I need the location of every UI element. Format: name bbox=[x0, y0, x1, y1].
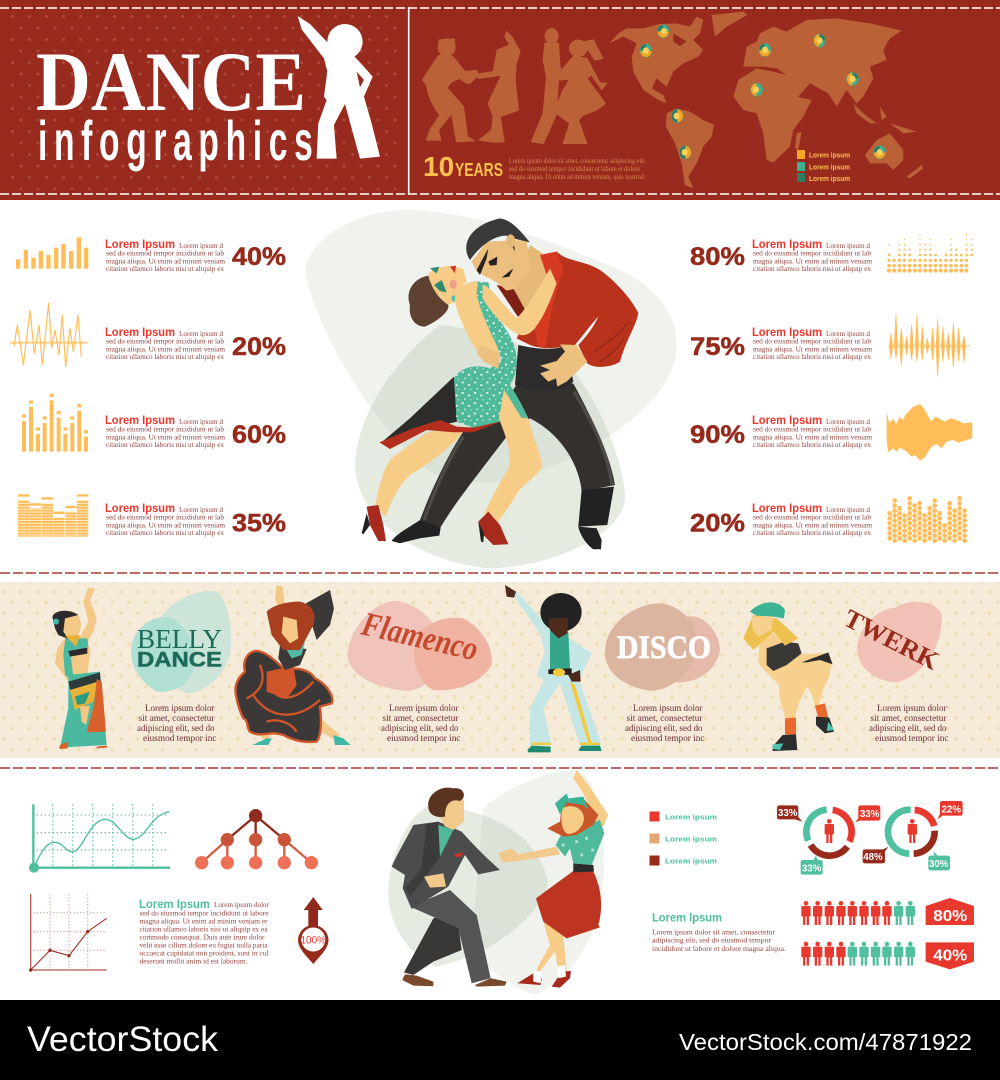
text: belly dance: sit amet, consectetur bbox=[138, 713, 214, 723]
label: 10 years: YEARS bbox=[455, 160, 503, 180]
text row: left 2: sed do eiusmod tempor incididunt ut lab bbox=[106, 336, 224, 346]
footer: watermark bar: VectorStock.com/47871922 bbox=[679, 1029, 972, 1055]
sequins on dress bbox=[454, 282, 517, 428]
chart: male donut: 33% bbox=[778, 808, 797, 819]
text row: right 3: 90% bbox=[690, 421, 745, 449]
title: Dance: DANCE bbox=[36, 35, 306, 129]
text row: right 3: citation ullamco laboris nisi ut aliquip ex bbox=[753, 440, 871, 449]
title: disco with blobs bbox=[605, 603, 720, 691]
text row: left 2: citation ullamco laboris nisi ut aliquip ex bbox=[106, 352, 224, 361]
text row: right 4: sed do eiusmod tempor incididunt ut lab bbox=[753, 512, 871, 522]
footer: watermark bar: VectorStock bbox=[27, 1020, 219, 1059]
illustration: tango couple bbox=[305, 210, 677, 568]
chart: male donut bbox=[777, 805, 880, 875]
text row: right 1: Lorem Ipsum bbox=[752, 239, 822, 251]
legend: three colours: Lorem ipsum bbox=[665, 858, 717, 866]
text row: right 1: magna aliqua. Ut enim ad minim veniam bbox=[753, 256, 872, 265]
woman's teal dress bbox=[454, 282, 528, 428]
divider dashed bbox=[0, 573, 1000, 768]
badge: 40% bbox=[926, 942, 974, 969]
text: belly dance bbox=[137, 703, 216, 743]
text: flamenco: sit amet, consectetur bbox=[382, 713, 458, 723]
panel: dance styles band bbox=[0, 582, 1000, 758]
text: disco: sit amet, consectetur bbox=[626, 713, 702, 723]
pictogram: 40 percent people bbox=[801, 942, 915, 966]
chart: male donut: 33% bbox=[860, 809, 879, 820]
title: twerk with blob: TWERK bbox=[839, 604, 944, 676]
woman's back leg bbox=[375, 429, 463, 517]
figure: flamenco dancer bbox=[235, 585, 351, 745]
text row: left 3: magna aliqua. Ut enim ad minim veniam bbox=[106, 432, 225, 441]
text row: right 1: 80% bbox=[690, 243, 745, 271]
hands and arm bbox=[424, 847, 560, 888]
text row: right 2: citation ullamco laboris nisi ut aliquip ex bbox=[753, 352, 871, 361]
chart: red line chart bbox=[29, 894, 107, 972]
text row: left 3: citation ullamco laboris nisi ut aliquip ex bbox=[106, 440, 224, 449]
man's red shirt bbox=[497, 252, 638, 367]
text row: right 1 bbox=[690, 239, 872, 273]
text block: bottom left: Lorem ipsum dolor bbox=[214, 900, 270, 909]
text row: right 2: magna aliqua. Ut enim ad minim veniam bbox=[753, 344, 872, 353]
text row: left 2: magna aliqua. Ut enim ad minim veniam bbox=[106, 344, 225, 353]
text row: left 3: 60% bbox=[232, 421, 286, 449]
text block: bottom left: citation ullamco laboris nisi ut aliquip ex ea bbox=[140, 925, 268, 934]
man's hand on back bbox=[477, 345, 500, 369]
man's head and hair bbox=[466, 218, 531, 291]
man's boots bbox=[392, 487, 614, 549]
text row: left 3: sed do eiusmod tempor incididunt ut lab bbox=[106, 424, 224, 434]
text row: right 3: Lorem Ipsum bbox=[752, 415, 822, 427]
text: disco: adipiscing elit, sed do bbox=[625, 723, 703, 733]
text row: right 4: Lorem Ipsum bbox=[752, 503, 822, 515]
background blobs bbox=[388, 770, 604, 995]
title: belly dance with blobs: BELLY bbox=[137, 624, 222, 654]
label: 10 years: 10 bbox=[423, 151, 454, 182]
text row: left 1: citation ullamco laboris nisi ut aliquip ex bbox=[106, 264, 224, 273]
text block: bottom right: adipiscing elit, sed do eiusmod tempor bbox=[652, 936, 772, 945]
text: disco: Lorem ipsum dolor bbox=[633, 703, 702, 713]
woman's teal blouse bbox=[556, 820, 604, 865]
text row: left 3 bbox=[105, 415, 286, 449]
text block: bottom left: sed do eiusmod tempor incididunt ut labore bbox=[140, 909, 269, 918]
text row: left 4: 35% bbox=[232, 510, 286, 538]
icon: 100 percent pin with arrow bbox=[298, 897, 328, 964]
woman's head and hair bbox=[547, 793, 598, 837]
text block: bottom left: commodo consequat. Duis aute irure dolor bbox=[140, 933, 265, 942]
skirt with red trim bbox=[379, 377, 501, 449]
icon: 100 percent pin with arrow: 100% bbox=[300, 934, 326, 946]
text row: right 4: magna aliqua. Ut enim ad minim veniam bbox=[753, 520, 872, 529]
text row: left 1: Lorem Ipsum bbox=[105, 239, 175, 251]
pictogram: 80 percent people bbox=[801, 901, 915, 925]
chart: yellow peak bars bbox=[22, 394, 88, 452]
footer: watermark bar bbox=[0, 1000, 1000, 1080]
map legend: Lorem ipsum bbox=[809, 176, 850, 183]
badge: 80% bbox=[926, 898, 974, 925]
text block: header description: magna aliqua. Ut enim ad minim veniam, quis nostrud bbox=[509, 173, 644, 181]
woman's heels bbox=[362, 505, 508, 545]
chart: spiked wave bbox=[888, 314, 970, 377]
text row: right 1: citation ullamco laboris nisi ut aliquip ex bbox=[753, 264, 871, 273]
chart: honeycomb equalizer bbox=[890, 495, 965, 541]
illustration: swing couple bbox=[388, 770, 608, 995]
text block: header description bbox=[509, 157, 646, 181]
woman's raised arm bbox=[573, 770, 608, 827]
text row: right 3: Lorem ipsum d bbox=[826, 417, 870, 426]
legend: three colours: Lorem ipsum bbox=[665, 814, 717, 822]
text: twerk: adipiscing elit, sed do bbox=[869, 723, 947, 733]
text row: left 4: sed do eiusmod tempor incididunt ut lab bbox=[106, 512, 224, 522]
title: infographics: infographics bbox=[38, 109, 313, 172]
text row: left 1: Lorem ipsum d bbox=[179, 241, 223, 250]
chart: female donut: 30% bbox=[929, 859, 948, 870]
text row: right 4 bbox=[690, 503, 872, 538]
chart: female donut: 22% bbox=[942, 804, 961, 815]
text row: left 3: Lorem Ipsum bbox=[105, 415, 175, 427]
text block: bottom left: Lorem Ipsum bbox=[139, 899, 210, 911]
woman's belt bbox=[573, 863, 594, 872]
chart: sound waveform bbox=[887, 404, 972, 461]
text row: left 4 bbox=[105, 503, 286, 538]
text row: left 2: 20% bbox=[232, 333, 286, 361]
chart: node tree bbox=[195, 809, 318, 869]
text row: right 4: 20% bbox=[690, 510, 745, 538]
text row: right 2: 75% bbox=[690, 333, 745, 361]
text row: left 1 bbox=[105, 239, 286, 273]
text: twerk: Lorem ipsum dolor bbox=[877, 703, 946, 713]
text: belly dance: adipiscing elit, sed do bbox=[137, 723, 215, 733]
map legend: Lorem ipsum bbox=[809, 152, 850, 160]
badge: 80%: 80% bbox=[933, 908, 968, 925]
text block: bottom right: Lorem Ipsum bbox=[652, 912, 722, 924]
text: flamenco bbox=[381, 703, 460, 743]
legend: three colours bbox=[650, 812, 717, 866]
text row: right 2: Lorem ipsum d bbox=[826, 329, 870, 338]
chart: yellow zigzag wave bbox=[10, 303, 88, 367]
text row: right 2: sed do eiusmod tempor incididunt ut lab bbox=[753, 336, 871, 346]
text row: right 3: sed do eiusmod tempor incididunt ut lab bbox=[753, 424, 871, 434]
woman's head and hair bbox=[409, 266, 467, 327]
text: disco: eiusmod tempor inc bbox=[631, 733, 704, 743]
woman's red skirt bbox=[536, 871, 601, 938]
text block: header description: sed do eiusmod tempor incididunt ut labore et dolore bbox=[509, 165, 640, 173]
chart: female donut bbox=[863, 801, 963, 870]
text: flamenco: adipiscing elit, sed do bbox=[381, 723, 459, 733]
text: belly dance: Lorem ipsum dolor bbox=[145, 703, 214, 713]
text: twerk: sit amet, consectetur bbox=[870, 713, 946, 723]
text row: left 4: Lorem ipsum d bbox=[179, 505, 223, 514]
text row: right 1: sed do eiusmod tempor incididunt ut lab bbox=[753, 248, 871, 258]
chart: yellow bars bbox=[16, 237, 88, 269]
title: belly dance with blobs: DANCE bbox=[137, 648, 222, 672]
text row: right 3: magna aliqua. Ut enim ad minim veniam bbox=[753, 432, 872, 441]
chart: yellow stacked equalizer bbox=[18, 494, 88, 537]
woman's shoes bbox=[517, 965, 571, 988]
legend: three colours: Lorem ipsum bbox=[665, 836, 717, 844]
woman's arm around neck bbox=[483, 268, 557, 335]
man's cummerbund bbox=[515, 345, 573, 391]
map legend bbox=[797, 150, 850, 183]
woman's legs bbox=[537, 922, 567, 973]
text row: right 3 bbox=[690, 415, 872, 449]
text row: right 2: Lorem Ipsum bbox=[752, 327, 822, 339]
woman's torso bbox=[455, 281, 500, 362]
text row: right 4: citation ullamco laboris nisi ut aliquip ex bbox=[753, 528, 871, 537]
text block: bottom left bbox=[139, 899, 270, 966]
map legend: Lorem ipsum bbox=[809, 164, 850, 172]
man's grey jacket bbox=[392, 822, 500, 909]
text row: left 2 bbox=[105, 327, 286, 361]
background blobs bbox=[305, 210, 677, 568]
panel: header banner bbox=[0, 0, 1000, 200]
woman's front leg bbox=[484, 385, 542, 523]
man's black trousers bbox=[420, 382, 615, 528]
figure: twerk dancer bbox=[743, 602, 834, 751]
figure: disco dancer bbox=[505, 585, 602, 752]
text block: bottom left: velit esse cillum dolore eu fugiat nulla paria bbox=[140, 941, 268, 950]
badge: 40%: 40% bbox=[933, 947, 968, 964]
text: flamenco: eiusmod tempor inc bbox=[387, 733, 460, 743]
text: twerk bbox=[869, 703, 948, 743]
text block: bottom right: Lorem ipsum dolor sit amet, consectetur bbox=[652, 928, 776, 936]
text: disco bbox=[625, 703, 704, 743]
text row: left 2: Lorem ipsum d bbox=[179, 329, 223, 338]
text row: right 4: Lorem ipsum d bbox=[826, 505, 870, 514]
text: belly dance: eiusmod tempor inc bbox=[143, 733, 216, 743]
chart: female donut: 48% bbox=[863, 852, 883, 863]
text row: left 3: Lorem ipsum d bbox=[179, 417, 223, 426]
icon: white disco dancer silhouette bbox=[298, 16, 380, 159]
text row: left 1: 40% bbox=[232, 243, 286, 271]
title: flamenco with blobs: Flamenco bbox=[357, 606, 481, 668]
world map with pie markers bbox=[609, 12, 923, 188]
title: belly dance with blobs bbox=[131, 591, 231, 693]
title: flamenco with blobs bbox=[347, 601, 492, 691]
text row: right 1: Lorem ipsum d bbox=[826, 241, 870, 250]
man's trousers bbox=[402, 890, 507, 987]
chart: dotted equalizer bbox=[889, 234, 972, 271]
text block: bottom right: incididunt ut labore et dolore magna aliqua. bbox=[652, 944, 786, 953]
text block: bottom right bbox=[652, 912, 786, 953]
text row: left 2: Lorem Ipsum bbox=[105, 327, 175, 339]
text block: bottom left: deserunt mollit anim id est laborum. bbox=[140, 957, 248, 966]
text block: bottom left: magna aliqua. Ut enim ad minim veniam er bbox=[140, 917, 268, 926]
leg slit bbox=[499, 389, 522, 421]
text row: left 4: citation ullamco laboris nisi ut aliquip ex bbox=[106, 528, 224, 537]
text row: left 4: Lorem Ipsum bbox=[105, 503, 175, 515]
text: twerk: eiusmod tempor inc bbox=[875, 733, 948, 743]
man's hand on waist bbox=[540, 344, 587, 387]
text row: right 2 bbox=[690, 327, 872, 361]
chart: teal smooth line bbox=[29, 804, 170, 873]
figure: belly dancer bbox=[52, 588, 107, 749]
text row: left 4: magna aliqua. Ut enim ad minim veniam bbox=[106, 520, 225, 529]
man's head and hair bbox=[428, 788, 464, 830]
man's shirt and tie bbox=[438, 825, 453, 857]
title: disco with blobs: DISCO bbox=[617, 630, 711, 666]
text block: header description: Lorem ipsum dolor sit amet, consectetur adipiscing elit, bbox=[509, 157, 646, 165]
chart: male donut: 33% bbox=[802, 864, 821, 875]
text row: left 1: sed do eiusmod tempor incididunt ut lab bbox=[106, 248, 224, 258]
text row: left 1: magna aliqua. Ut enim ad minim veniam bbox=[106, 256, 225, 265]
man's collar bbox=[533, 252, 563, 348]
text: flamenco: Lorem ipsum dolor bbox=[389, 703, 458, 713]
text block: bottom left: occaecat cupidatat non proident, sunt in cul bbox=[140, 949, 268, 958]
silhouettes: two dancing couples bbox=[423, 29, 607, 143]
man's skin chest and neck bbox=[513, 245, 555, 345]
